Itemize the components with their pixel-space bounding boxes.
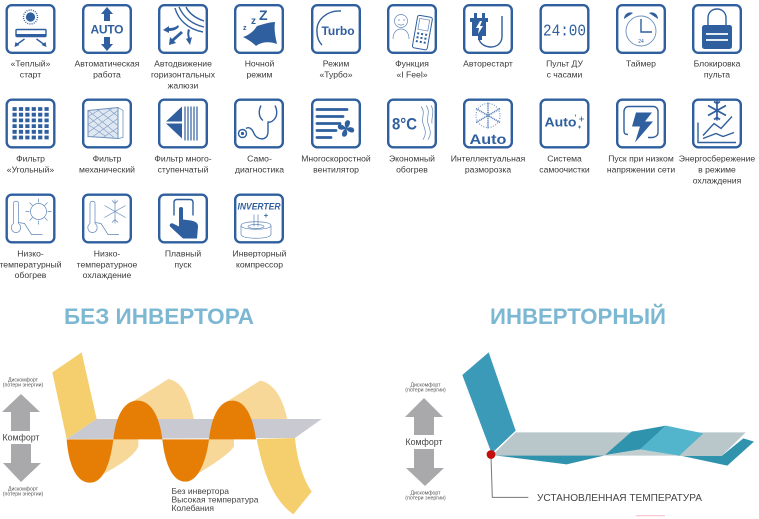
- label: Интеллектуальная: [451, 154, 526, 164]
- arrow: up: [405, 398, 443, 435]
- feature: intelligent defrost: [451, 100, 526, 174]
- feature: cooling energy saving: [679, 100, 755, 186]
- icon: lightning: [617, 100, 665, 147]
- label: Режим: [323, 58, 349, 68]
- feature: turbo: [312, 5, 360, 80]
- label: Автоматическая: [75, 58, 140, 68]
- feature: remote with clock: [541, 5, 588, 80]
- wave caption: Без инвертора: [172, 486, 229, 496]
- label: пульта: [704, 70, 730, 80]
- wave caption: Колебания: [172, 503, 214, 513]
- label: Функция: [395, 58, 429, 68]
- heading: inverter: ИНВЕРТОРНЫЙ: [490, 304, 666, 329]
- label: компрессор: [236, 260, 283, 270]
- label: охлаждения: [693, 176, 742, 186]
- icon: thermometer and sun: [7, 195, 54, 242]
- label: Автодвижение: [154, 58, 212, 68]
- icon: grid filter: [7, 100, 54, 147]
- icon: night: Z: [259, 7, 268, 23]
- label: температурный: [0, 260, 62, 270]
- label: Многоскоростной: [301, 154, 371, 164]
- label: «I Feel»: [396, 70, 428, 80]
- feature: low temperature heating: [0, 195, 62, 280]
- label: горизонтальных: [151, 70, 216, 80]
- label: вентилятор: [313, 164, 359, 174]
- label: обогрев: [396, 164, 428, 174]
- icon: pressing hand: [159, 195, 207, 242]
- icon: padlock: [693, 5, 741, 53]
- label: Фильтр: [93, 154, 122, 164]
- icon: auto: AUTO: [90, 22, 124, 36]
- text: discomfort lower: (потери энергии): [405, 496, 446, 502]
- feature: mechanical filter: [79, 100, 135, 174]
- chart: without inverter wave: [52, 352, 322, 514]
- icon: inverter compressor: INVERTER: [238, 202, 281, 212]
- label: Авторестарт: [463, 58, 513, 68]
- arrow: down: [3, 444, 41, 482]
- label: Само-: [247, 154, 272, 164]
- comfort scale: right: [405, 382, 446, 502]
- feature: night mode: [235, 5, 283, 80]
- feature: self-diagnostics: [235, 100, 284, 174]
- label: Низко-: [94, 248, 120, 258]
- marker: set temperature: [487, 450, 495, 459]
- label: Ночной: [245, 58, 274, 68]
- label: «Теплый»: [11, 58, 51, 68]
- icon: fan speeds: [312, 100, 360, 147]
- feature: soft start: [159, 195, 207, 270]
- label: обогрев: [15, 270, 47, 280]
- label: пуск: [175, 260, 192, 270]
- icon: stethoscope: [235, 100, 283, 147]
- icon: night: z: [251, 16, 256, 27]
- label: в режиме: [698, 164, 736, 174]
- arrow: down: [406, 449, 444, 486]
- icon: person and remote: [388, 5, 436, 53]
- label: set temperature: УСТАНОВЛЕННАЯ ТЕМПЕРАТУРА: [537, 493, 702, 504]
- feature: warm start: [7, 5, 54, 80]
- feature: inverter compressor: [233, 195, 287, 270]
- icon: plug: [464, 5, 512, 53]
- label: Экономный: [389, 154, 435, 164]
- label: старт: [20, 70, 41, 80]
- label: «Угольный»: [7, 164, 54, 174]
- icon: thermometer and snowflake: [83, 195, 131, 242]
- label: ступенчатый: [158, 164, 209, 174]
- text: comfort: Комфорт: [406, 437, 442, 447]
- label: Низко-: [17, 248, 44, 258]
- label: Пуск при низком: [608, 154, 674, 164]
- feature: carbon filter: [7, 100, 54, 174]
- label: охлаждение: [83, 270, 132, 280]
- feature: timer: [617, 5, 665, 68]
- feature: I Feel: [388, 5, 436, 80]
- text: comfort: Комфорт: [3, 432, 39, 442]
- label: Фильтр: [16, 154, 45, 164]
- wave ribbon: [462, 352, 754, 497]
- arrow: up: [2, 394, 40, 431]
- icon: alarm clock: 24: [638, 39, 644, 45]
- label: разморозка: [465, 164, 511, 174]
- label: напряжении сети: [607, 164, 675, 174]
- text: discomfort upper: (потери энергии): [405, 388, 446, 394]
- icon: stages: [159, 100, 207, 147]
- icon: defrost auto: Auto: [470, 131, 506, 147]
- label: Плавный: [165, 248, 201, 258]
- label: механический: [79, 164, 135, 174]
- text: discomfort lower: Дискомфорт: [410, 490, 441, 496]
- text: discomfort upper: (потери энергии): [3, 382, 43, 388]
- icon: snowflake and graph: [693, 100, 741, 147]
- label: работа: [93, 70, 121, 80]
- label: «Турбо»: [319, 70, 353, 80]
- icon: turbo: Turbo: [321, 24, 355, 38]
- feature: low temperature cooling: [77, 195, 138, 280]
- label: с часами: [547, 70, 583, 80]
- text: discomfort upper: Дискомфорт: [410, 382, 441, 388]
- feature: low voltage start: [607, 100, 675, 174]
- heading: without inverter: БЕЗ ИНВЕРТОРА: [64, 304, 254, 329]
- icon: 8°C: 8°C: [392, 114, 417, 134]
- label: жалюзи: [168, 80, 199, 90]
- icon: louvers: [159, 5, 207, 53]
- text: discomfort lower: (потери энергии): [3, 492, 43, 498]
- text: discomfort upper: Дискомфорт: [8, 378, 39, 384]
- label: самоочистки: [539, 164, 590, 174]
- label: Блокировка: [694, 58, 741, 68]
- chart: inverter flat wave: [462, 352, 754, 504]
- feature: multi-stage filter: [154, 100, 212, 174]
- feature: automatic mode: [75, 5, 140, 80]
- label: Энергосбережение: [679, 154, 755, 164]
- label: температурное: [77, 260, 138, 270]
- icon: auto clean: Auto: [544, 116, 577, 130]
- text: discomfort lower: Дискомфорт: [8, 486, 39, 492]
- label: Система: [547, 154, 582, 164]
- wave caption: Высокая температура: [172, 494, 259, 504]
- feature: self-cleaning: [539, 100, 590, 174]
- icon: night: z: [243, 25, 247, 32]
- label: Пульт ДУ: [546, 58, 583, 68]
- icon: mesh filter: [83, 100, 131, 147]
- wave ribbon: [52, 352, 322, 514]
- feature: louver auto movement: [151, 5, 216, 91]
- feature: auto restart: [463, 5, 513, 68]
- label: Таймер: [626, 58, 656, 68]
- feature: remote lock: [693, 5, 741, 80]
- label: диагностика: [235, 164, 284, 174]
- label: режим: [247, 70, 273, 80]
- icon: night: [235, 5, 283, 53]
- label: Инверторный: [233, 248, 287, 258]
- feature: multi-speed fan: [301, 100, 371, 174]
- feature: economy heating: [388, 100, 436, 174]
- icon: warm start: [7, 5, 54, 53]
- icon: digital clock: 24:00: [543, 22, 586, 42]
- comfort scale: left: [2, 378, 43, 498]
- label: Фильтр много-: [154, 154, 212, 164]
